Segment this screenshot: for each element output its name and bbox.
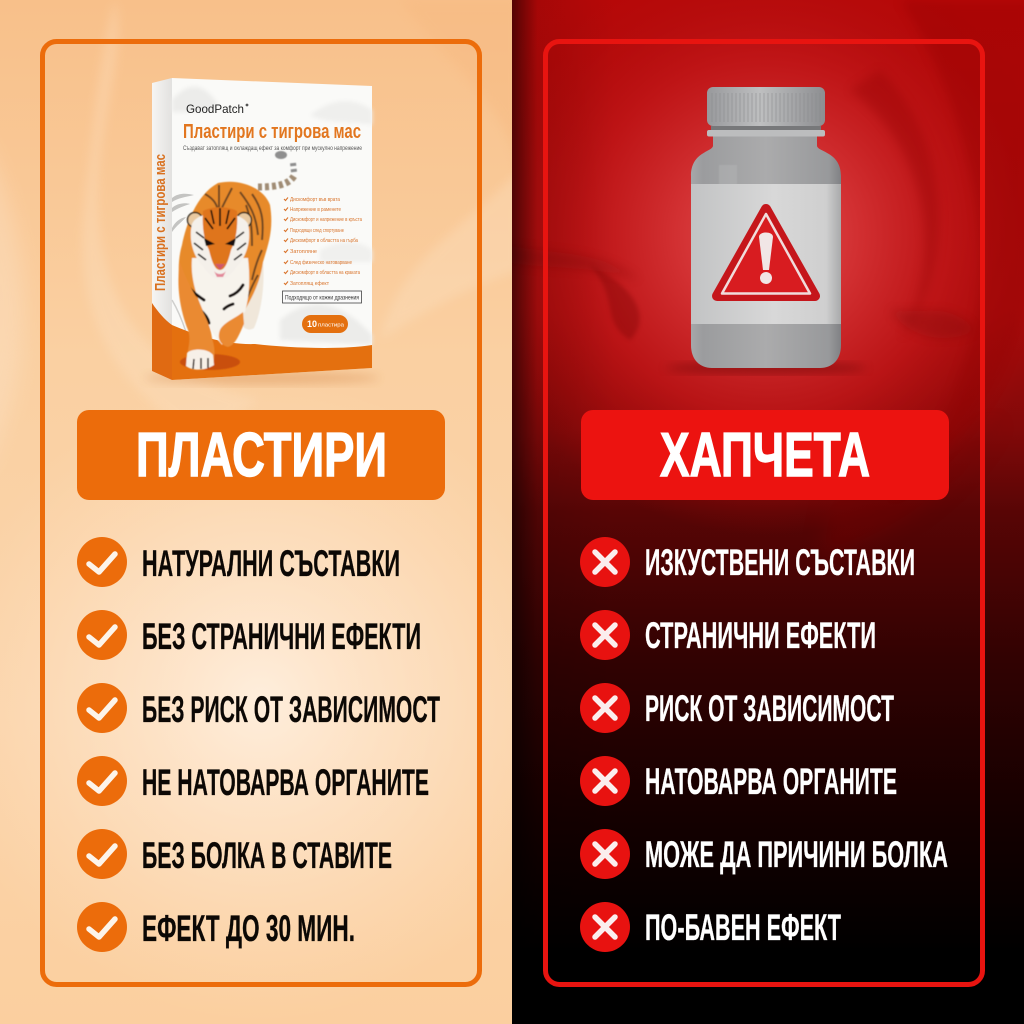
bottle label — [691, 184, 841, 324]
item: side effects — [580, 610, 876, 660]
item: natural ingredients: НАТУРАЛНИ СЪСТАВКИ — [142, 542, 400, 584]
benefit list on box: Дискомфорт в областта на гърба — [290, 238, 358, 244]
item: may cause pain — [580, 829, 948, 879]
bottle cap — [707, 87, 825, 130]
tiger left leg — [178, 262, 215, 368]
box spine: Пластири с тигрова мас — [152, 154, 169, 291]
item: no addiction risk — [77, 683, 440, 733]
panel: patches frame — [42, 42, 480, 984]
item: no addiction risk: БЕЗ РИСК ОТ ЗАВИСИМОСТ — [142, 688, 440, 730]
item: no organ strain — [77, 756, 429, 806]
badge: pills: ХАПЧЕТА — [660, 421, 870, 490]
item: strains organs — [580, 756, 897, 806]
box pill: пластира — [318, 322, 345, 328]
box title: Пластири с тигрова мас — [183, 121, 361, 143]
item: no side effects: БЕЗ СТРАНИЧНИ ЕФЕКТИ — [142, 615, 421, 657]
box pill: 10 — [307, 319, 317, 329]
benefit list on box: Напрежение в раменете — [290, 207, 341, 213]
ink mountains and bamboo — [172, 87, 372, 345]
tail — [258, 151, 294, 187]
item: slower effect: ПО-БАВЕН ЕФЕКТ — [645, 906, 841, 948]
brand name: GoodPatch — [186, 102, 244, 116]
badge: pills — [581, 410, 949, 500]
item: effect within 30 minutes — [77, 902, 355, 952]
box label — [282, 291, 362, 303]
item: artificial ingredients — [580, 537, 915, 587]
tiger right leg — [219, 312, 244, 347]
benefit list on box: Затопляне — [290, 249, 317, 255]
benefit list on box — [284, 197, 362, 287]
tiger shadow — [180, 354, 240, 370]
badge: patches: ПЛАСТИРИ — [136, 421, 387, 490]
warning triangle icon — [717, 209, 815, 296]
item: natural ingredients — [77, 537, 400, 587]
box pill — [302, 315, 348, 333]
benefit list on box: Подходящи след спортуване — [290, 228, 344, 234]
warning bottle — [666, 87, 866, 373]
list: pills drawbacks — [580, 537, 948, 952]
tiger body — [179, 182, 271, 312]
right background — [512, 0, 1024, 898]
item: no organ strain: НЕ НАТОВАРВА ОРГАНИТЕ — [142, 761, 429, 803]
orange base — [172, 325, 372, 380]
bottle neck ring — [707, 130, 825, 136]
tiger white chest — [192, 258, 249, 345]
list: patches benefits — [77, 537, 440, 952]
box spine — [152, 78, 172, 380]
benefit list on box: Дискомфорт и напрежение в кръста — [290, 217, 362, 223]
item: effect within 30 minutes: ЕФЕКТ ДО 30 МИН. — [142, 907, 355, 949]
box front — [172, 78, 372, 380]
benefit list on box: Дискомфорт в областта на краката — [290, 270, 360, 276]
item: no joint pain — [77, 829, 392, 879]
item: no joint pain: БЕЗ БОЛКА В СТАВИТЕ — [142, 834, 392, 876]
item: slower effect — [580, 902, 841, 952]
product box: tiger patches — [144, 78, 380, 384]
left background — [0, 0, 520, 1024]
panel: pills frame — [546, 42, 982, 984]
bottle highlight — [719, 165, 737, 185]
item: no side effects — [77, 610, 421, 660]
badge: patches — [77, 410, 445, 500]
item: addiction risk — [580, 683, 894, 733]
bottle shoulder and neck — [691, 136, 841, 190]
benefit list on box: Дискомфорт във врата — [290, 197, 340, 203]
bottle body — [691, 184, 841, 368]
benefit list on box: След физическо натоварване — [290, 260, 352, 266]
benefit list on box: Затоплящ ефект — [290, 281, 329, 287]
hind leg — [240, 250, 264, 330]
tiger head — [188, 207, 252, 279]
tiger illustration — [178, 151, 294, 370]
box subtitle: Създават затоплящ и охлаждащ ефект за комфорт при мускулно напрежение — [183, 146, 363, 152]
box label: Подходящо от кожни дразнения — [285, 296, 359, 302]
